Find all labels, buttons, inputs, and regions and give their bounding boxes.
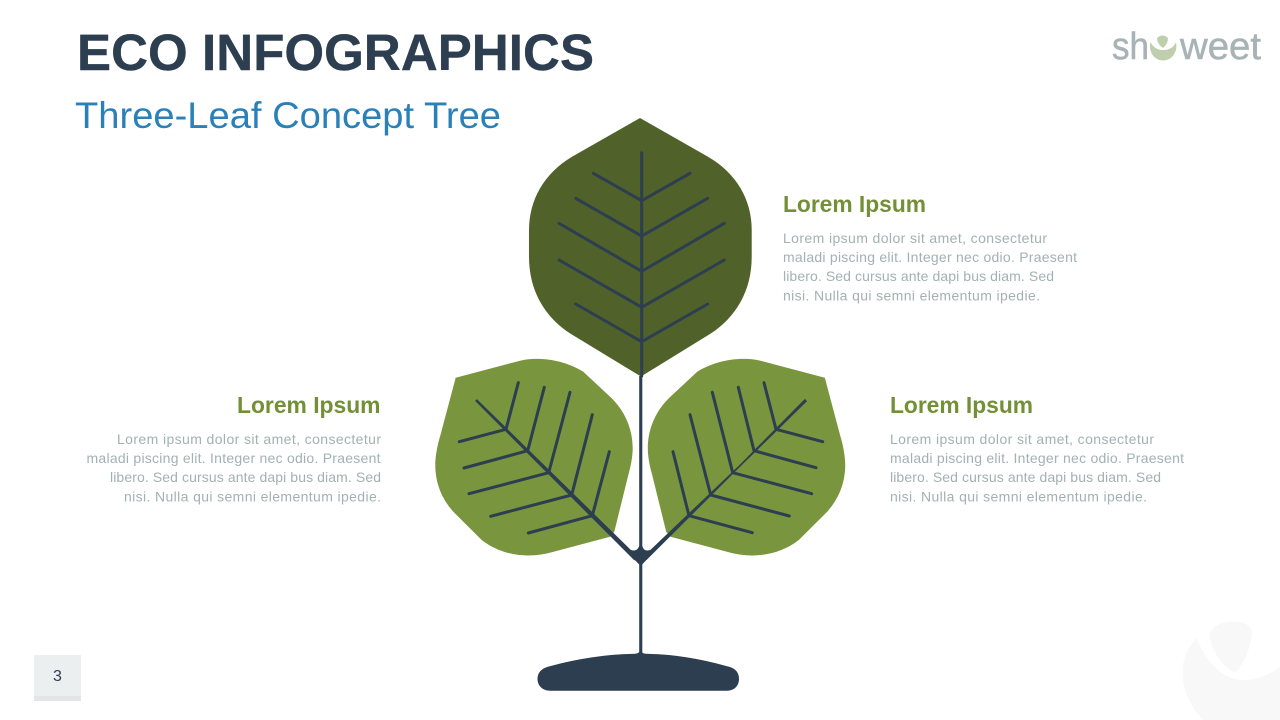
body text: nisi. Nulla qui semni elementum ipedie. — [890, 488, 1147, 504]
body text: libero. Sed cursus ante dapi bus diam. Sed — [783, 268, 1054, 284]
body text: Lorem ipsum dolor sit amet, consectetur — [890, 431, 1154, 447]
body text — [890, 431, 1184, 504]
heading: Lorem Ipsum — [237, 392, 380, 418]
right leaf — [644, 359, 845, 560]
body text — [783, 230, 1077, 304]
title: ECO INFOGRAPHICS — [77, 24, 594, 81]
body text: Lorem ipsum dolor sit amet, consectetur — [117, 431, 381, 447]
body text: maladi piscing elit. Integer nec odio. Praesent — [86, 450, 381, 466]
brand logo — [1112, 26, 1261, 68]
brand logo: sh — [1112, 26, 1149, 68]
body text — [86, 431, 381, 504]
tree illustration — [435, 118, 845, 691]
heading: Lorem Ipsum — [890, 392, 1033, 418]
text block: right leaf — [890, 392, 1184, 504]
page number box: 3 — [53, 668, 62, 685]
body text: nisi. Nulla qui semni elementum ipedie. — [124, 488, 381, 504]
left leaf — [435, 359, 637, 560]
body text: nisi. Nulla qui semni elementum ipedie. — [783, 288, 1040, 304]
brand logo: weet — [1179, 26, 1261, 68]
body text: Lorem ipsum dolor sit amet, consectetur — [783, 230, 1047, 246]
body text: maladi piscing elit. Integer nec odio. Praesent — [783, 249, 1077, 265]
background watermark logo — [1183, 621, 1280, 720]
trunk and branch node — [628, 376, 653, 656]
soil mound — [538, 649, 739, 691]
text block: left leaf — [86, 392, 381, 504]
subtitle: Three-Leaf Concept Tree — [75, 95, 501, 136]
body text: maladi piscing elit. Integer nec odio. Praesent — [890, 450, 1184, 466]
body text: libero. Sed cursus ante dapi bus diam. Sed — [890, 469, 1161, 485]
page number box — [34, 655, 81, 701]
top leaf — [529, 118, 752, 376]
text block: top leaf — [783, 191, 1077, 304]
heading: Lorem Ipsum — [783, 191, 926, 217]
body text: libero. Sed cursus ante dapi bus diam. Sed — [110, 469, 381, 485]
